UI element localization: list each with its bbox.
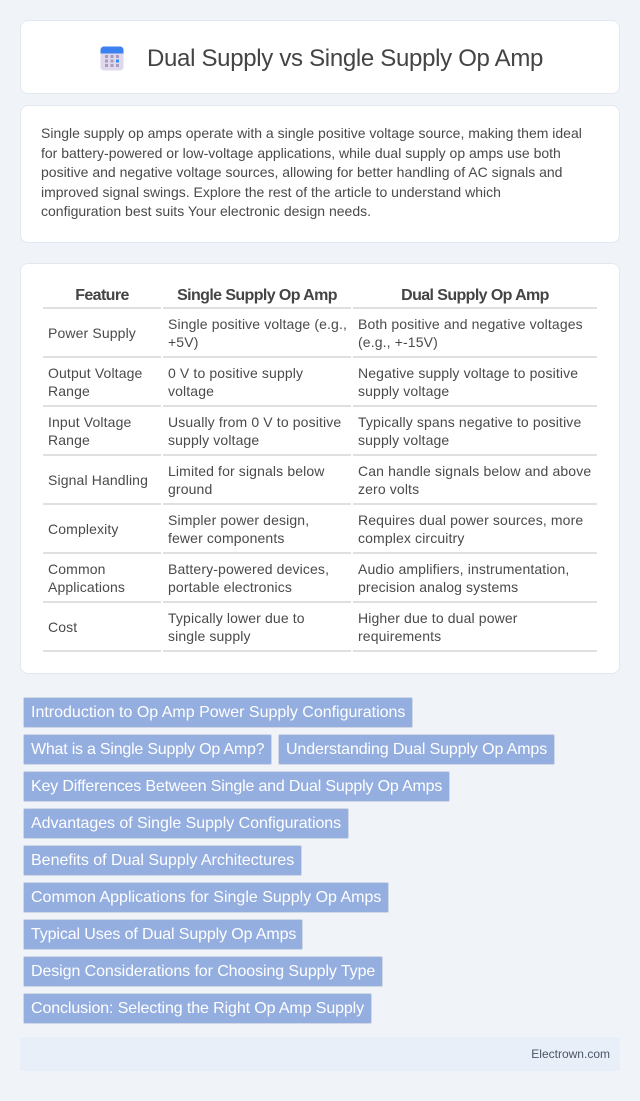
intro text — [41, 125, 582, 219]
tag: What is a Single Supply Op Amp? — [31, 741, 264, 758]
text: portable electronics — [168, 579, 292, 595]
tag — [23, 993, 372, 1024]
tag: Introduction to Op Amp Power Supply Configurations — [31, 704, 405, 721]
text: single supply — [168, 628, 251, 644]
tag — [278, 734, 555, 765]
intro panel — [20, 105, 620, 243]
tag — [23, 919, 303, 950]
footer credit: Electrown.com — [531, 1047, 610, 1061]
text: voltage — [168, 383, 214, 399]
comparison table — [43, 287, 597, 652]
text: ground — [168, 481, 212, 497]
tag: Typical Uses of Dual Supply Op Amps — [31, 926, 296, 943]
text: Range — [48, 432, 90, 448]
intro text: improved signal swings. Explore the rest of the article to understand which — [41, 184, 501, 200]
text: Range — [48, 383, 90, 399]
text: supply voltage — [358, 432, 449, 448]
tag: Advantages of Single Supply Configurations — [31, 815, 341, 832]
row: cost — [43, 610, 597, 652]
row: signal handling — [43, 463, 597, 505]
text: Higher due to dual power — [358, 610, 518, 626]
text: Common — [48, 561, 106, 577]
text: requirements — [358, 628, 441, 644]
tag — [23, 697, 413, 728]
comparison table: Both positive and negative voltages — [358, 316, 583, 332]
footer — [20, 1037, 620, 1071]
text: fewer components — [168, 530, 284, 546]
text: Requires dual power sources, more — [358, 512, 583, 528]
text: complex circuitry — [358, 530, 464, 546]
tag: Common Applications for Single Supply Op Amps — [31, 889, 381, 906]
text: precision analog systems — [358, 579, 518, 595]
comparison table: Feature — [75, 287, 129, 304]
text: Typically lower due to — [168, 610, 305, 626]
tag — [23, 956, 383, 987]
comparison table: Dual Supply Op Amp — [401, 287, 549, 304]
text: zero volts — [358, 481, 419, 497]
tag — [23, 734, 272, 765]
tag — [23, 845, 302, 876]
intro text: Single supply op amps operate with a single positive voltage source, making them ideal — [41, 125, 582, 141]
header panel — [20, 20, 620, 94]
comparison table panel — [20, 263, 620, 674]
intro text: configuration best suits Your electronic design needs. — [41, 203, 371, 219]
row: power supply — [43, 316, 597, 358]
comparison table: Power Supply — [48, 325, 136, 341]
tag — [23, 771, 450, 802]
intro text: for battery-powered or low-voltage applications, while dual supply op amps use both — [41, 145, 561, 161]
tag: Benefits of Dual Supply Architectures — [31, 852, 294, 869]
table header — [43, 287, 597, 309]
title: Dual Supply vs Single Supply Op Amp — [147, 45, 543, 72]
icon: calendar — [100, 46, 124, 70]
text: Signal Handling — [48, 472, 148, 488]
text: Applications — [48, 579, 125, 595]
topic tags — [23, 697, 555, 1024]
row: output voltage range — [43, 365, 597, 407]
tag: Design Considerations for Choosing Supply Type — [31, 963, 375, 980]
row: input voltage range — [43, 414, 597, 456]
row: complexity — [43, 512, 597, 554]
tag: Understanding Dual Supply Op Amps — [286, 741, 547, 758]
text: Audio amplifiers, instrumentation, — [358, 561, 569, 577]
comparison table: 0 V to positive supply — [168, 365, 303, 381]
comparison table: Single Supply Op Amp — [177, 287, 337, 304]
text: Battery-powered devices, — [168, 561, 329, 577]
comparison table: Negative supply voltage to positive — [358, 365, 578, 381]
tag — [23, 808, 349, 839]
text: supply voltage — [168, 432, 259, 448]
text: Can handle signals below and above — [358, 463, 591, 479]
text: supply voltage — [358, 383, 449, 399]
text: Complexity — [48, 521, 119, 537]
comparison table: Single positive voltage (e.g., — [168, 316, 347, 332]
text: Simpler power design, — [168, 512, 309, 528]
comparison table: Output Voltage — [48, 365, 142, 381]
tag: Conclusion: Selecting the Right Op Amp Supply — [31, 1000, 364, 1017]
text: Cost — [48, 619, 77, 635]
text: Input Voltage — [48, 414, 131, 430]
tag: Key Differences Between Single and Dual Supply Op Amps — [31, 778, 442, 795]
tag — [23, 882, 389, 913]
intro text: positive and negative voltage sources, allowing for better handling of AC signals and — [41, 164, 562, 180]
text: Limited for signals below — [168, 463, 325, 479]
comparison table: (e.g., +-15V) — [358, 334, 438, 350]
text: Usually from 0 V to positive — [168, 414, 341, 430]
text: Typically spans negative to positive — [358, 414, 581, 430]
row: common applications — [43, 561, 597, 603]
comparison table: +5V) — [168, 334, 198, 350]
